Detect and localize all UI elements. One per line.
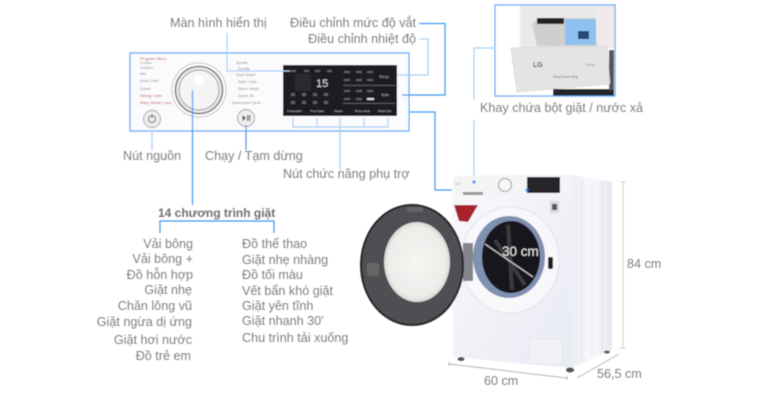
panel: detergent tray photo: Fresh: [586, 63, 595, 67]
label: 30 cm: 30 cm: [502, 244, 539, 259]
dimension: height: [620, 182, 626, 348]
door: [361, 205, 463, 325]
list: programs left: Giặt nhẹ: [144, 283, 192, 297]
display screen: 15: [316, 78, 328, 90]
heading: temperature label: Điều chỉnh nhiệt độ: [308, 32, 416, 46]
display screen: Spin: [381, 92, 389, 97]
energy badge: [454, 205, 478, 222]
arrow: temperature leader: [397, 39, 428, 75]
label: 84 cm: 84 cm: [627, 257, 661, 271]
panel program list: Allergy Care: [140, 93, 163, 98]
panel program list: Stain Care: [238, 79, 258, 84]
heading: display label: Màn hình hiển thị: [170, 16, 267, 30]
panel: control panel: [130, 53, 409, 131]
icon: start pause button: [238, 110, 254, 126]
panel program list: Easy Care: [140, 78, 159, 83]
arrow: auxiliary buttons bracket: [293, 118, 388, 170]
machine front: [452, 175, 572, 368]
list: programs left: [97, 237, 193, 363]
connector dots: [472, 180, 528, 192]
panel program list: Baby Steam Care: [140, 100, 172, 105]
dimension: depth: [577, 354, 619, 378]
list: programs left: Giặt hơi nước: [114, 333, 192, 347]
heading: auxiliary label: Nút chức năng phụ trợ: [283, 167, 410, 181]
list: programs left: Vải bông: [143, 237, 193, 251]
display screen: Turbowash: [287, 109, 302, 113]
list: programs right: Chu trình tải xuống: [242, 331, 348, 345]
machine side: [572, 175, 612, 368]
list: programs right: Đồ tối màu: [242, 268, 303, 282]
arrow: tray leader: [474, 48, 495, 182]
list: programs right: [242, 237, 348, 345]
hinge: [463, 243, 473, 281]
display screen: Wash Opt: [378, 109, 391, 113]
panel program list: Gentle: [238, 66, 251, 71]
panel program list: Silent Wash: [238, 86, 259, 91]
list: programs right: Giặt yên tĩnh: [242, 299, 313, 313]
arrow: panel to machine leader: [409, 112, 527, 190]
heading: programs title: 14 chương trình giặt: [158, 206, 275, 220]
panel program list: Quick 30: [238, 93, 255, 98]
list: programs left: Vải bông +: [132, 252, 193, 266]
panel: detergent tray photo: [495, 5, 615, 96]
display screen: Steam: [334, 109, 343, 113]
list: programs right: Đồ thể thao: [242, 237, 307, 251]
display screen: [283, 65, 397, 116]
feet: [458, 350, 610, 372]
panel program list: Cotton: [140, 60, 152, 65]
machine control strip: LG: [455, 181, 460, 186]
arrow: dial leader: [192, 90, 194, 205]
label: 56,5 cm: 56,5 cm: [597, 367, 642, 381]
lower panel: [529, 339, 562, 364]
list: programs right: Giặt nhanh 30': [242, 314, 324, 328]
drum: [473, 216, 545, 298]
list: programs right: Giặt nhẹ nhàng: [242, 253, 328, 267]
door latch: [548, 257, 553, 269]
dimension: drum diameter: [485, 244, 533, 277]
list: programs left: Giặt ngừa dị ứng: [97, 315, 192, 329]
icon: power button: [144, 110, 160, 128]
panel program list: [140, 56, 262, 105]
energy label: [550, 201, 559, 213]
panel program list: Sports: [236, 60, 248, 65]
panel program list: Duvet: [140, 86, 151, 91]
panel: detergent tray photo: LG: [533, 62, 543, 69]
panel program list: Program Menu: [140, 56, 166, 61]
heading: power label: Nút nguồn: [123, 149, 181, 163]
arrow: display leader: [227, 33, 290, 71]
heading: start pause label: Chạy / Tạm dừng: [205, 149, 303, 163]
arrow: spin leader: [402, 24, 445, 95]
heading: spin label: Điều chỉnh mức độ vắt: [290, 15, 416, 30]
label: 60 cm: 60 cm: [484, 374, 518, 388]
panel program list: Dark Wash: [236, 72, 256, 77]
display screen: Temp.: [379, 74, 390, 79]
machine control strip: [454, 176, 572, 195]
dimension: width: [449, 362, 567, 380]
list: programs left: Chăn lông vũ: [118, 299, 192, 313]
drum surround: [461, 207, 559, 313]
panel program list: Mix: [140, 71, 146, 76]
arrow: start pause leader: [245, 125, 247, 150]
panel program list: Cotton+: [140, 65, 155, 70]
arrow: programs bracket: [160, 221, 274, 233]
arrow: power leader: [151, 130, 153, 150]
heading: tray label: Khay chứa bột giặt / nước xả: [480, 101, 643, 115]
list: programs left: Đồ trẻ em: [136, 349, 191, 363]
washing machine: [361, 175, 612, 372]
list: programs left: Đồ hỗn hợp: [127, 267, 193, 282]
icon: program dial: [172, 63, 226, 117]
panel program list: Download Cycle: [232, 100, 262, 105]
list: programs right: Vết bẩn khó giặt: [242, 284, 334, 298]
display screen: Rinse Hold: [355, 109, 370, 113]
display screen: Time Save: [310, 109, 325, 113]
panel: detergent tray photo: Wool Drum Reg.: [553, 75, 579, 79]
